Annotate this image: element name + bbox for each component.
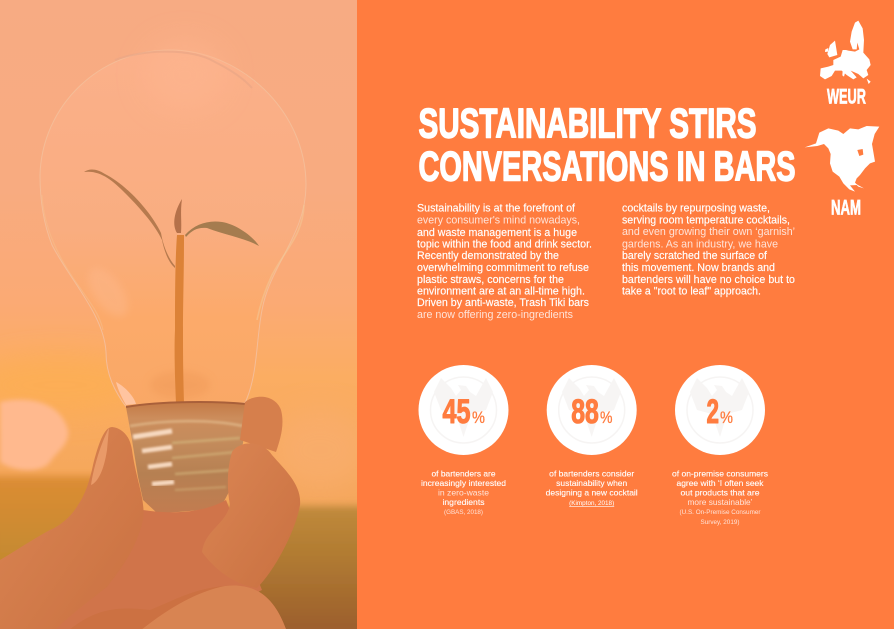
caption: 45%: in zero-waste (438, 488, 489, 498)
body text: left column: Sustainability is at the forefront of (417, 202, 576, 214)
stat circle: 45% (418, 365, 508, 455)
stat circle: 88%: % (600, 408, 612, 427)
caption: 2%: (U.S. On-Premise Consumer (680, 509, 760, 516)
caption: 88%: of bartenders consider (549, 468, 634, 478)
stat circle: 45%: % (472, 408, 485, 427)
icon: Western Europe map (820, 21, 871, 84)
caption: 45% (421, 468, 506, 516)
body text: right column: cocktails by repurposing waste, (622, 202, 770, 214)
body text: right column: take a "root to leaf" approach. (622, 286, 761, 298)
caption: 2%: out products that are (680, 488, 760, 498)
caption: 45%: increasingly interested (421, 478, 506, 488)
body text: right column: gardens. As an industry, we have (622, 238, 778, 250)
photo: light bulb with seedling held in a hand (0, 0, 370, 629)
body text: left column: overwhelming commitment to refuse (417, 262, 589, 274)
caption: 45%: (GBAS, 2018) (444, 509, 483, 516)
hand holding the bulb (0, 397, 300, 629)
screw base of the bulb (126, 402, 246, 513)
stat circle: 88% (547, 365, 637, 455)
caption: 2%: of on-premise consumers (672, 468, 768, 478)
caption: 88%: (Kimpton, 2018) (569, 500, 614, 507)
icon: North America map (805, 126, 879, 192)
title (418, 100, 796, 190)
stat circle: 2%: % (720, 408, 733, 427)
body text: right column: bartenders will have no choice but to (622, 274, 795, 286)
body text: right column (622, 202, 795, 298)
caption: 2% (672, 468, 768, 526)
caption: 2%: Survey, 2019) (700, 519, 740, 526)
body text: left column: environment are at an all-time high. (417, 286, 585, 298)
body text: right column: this movement. Now brands and (622, 262, 775, 274)
stat circle: 2%: 2 (706, 393, 719, 431)
body text: left column: Driven by anti-waste, Trash Tiki bars (417, 297, 589, 309)
label: WEUR: WEUR (827, 86, 866, 108)
caption: 45%: ingredients (442, 497, 484, 507)
caption: 2%: more sustainable’ (688, 497, 753, 507)
body text: left column: every consumer's mind nowadays, (417, 214, 580, 226)
body text: left column: topic within the food and drink sector. (417, 238, 592, 250)
glass bulb (40, 50, 306, 408)
body text: left column (417, 202, 592, 321)
label: NAM: NAM (831, 196, 861, 220)
body text: left column: plastic straws, concerns for the (417, 274, 564, 286)
body text: right column: barely scratched the surface of (622, 250, 768, 262)
title: SUSTAINABILITY STIRS (418, 100, 756, 146)
caption: 88% (546, 468, 638, 507)
caption: 2%: agree with ‘I often seek (676, 478, 764, 488)
caption: 88%: designing a new cocktail (546, 488, 638, 498)
caption: 88%: sustainability when (556, 478, 628, 488)
stat circle: 88%: 88 (571, 393, 599, 431)
body text: left column: are now offering zero-ingredients (417, 309, 573, 321)
stat circle: 2% (675, 365, 765, 455)
caption: 45%: of bartenders are (432, 468, 496, 478)
body text: left column: and waste management is a huge (417, 227, 577, 239)
body text: right column: and even growing their own ‘garnish’ (622, 226, 795, 238)
seedling stem and leaves (84, 170, 259, 403)
body text: left column: Recently demonstrated by the (417, 250, 559, 262)
stat circle: 45%: 45 (442, 393, 470, 431)
setting sun (0, 400, 68, 470)
body text: right column: serving room temperature cocktails, (622, 214, 790, 226)
